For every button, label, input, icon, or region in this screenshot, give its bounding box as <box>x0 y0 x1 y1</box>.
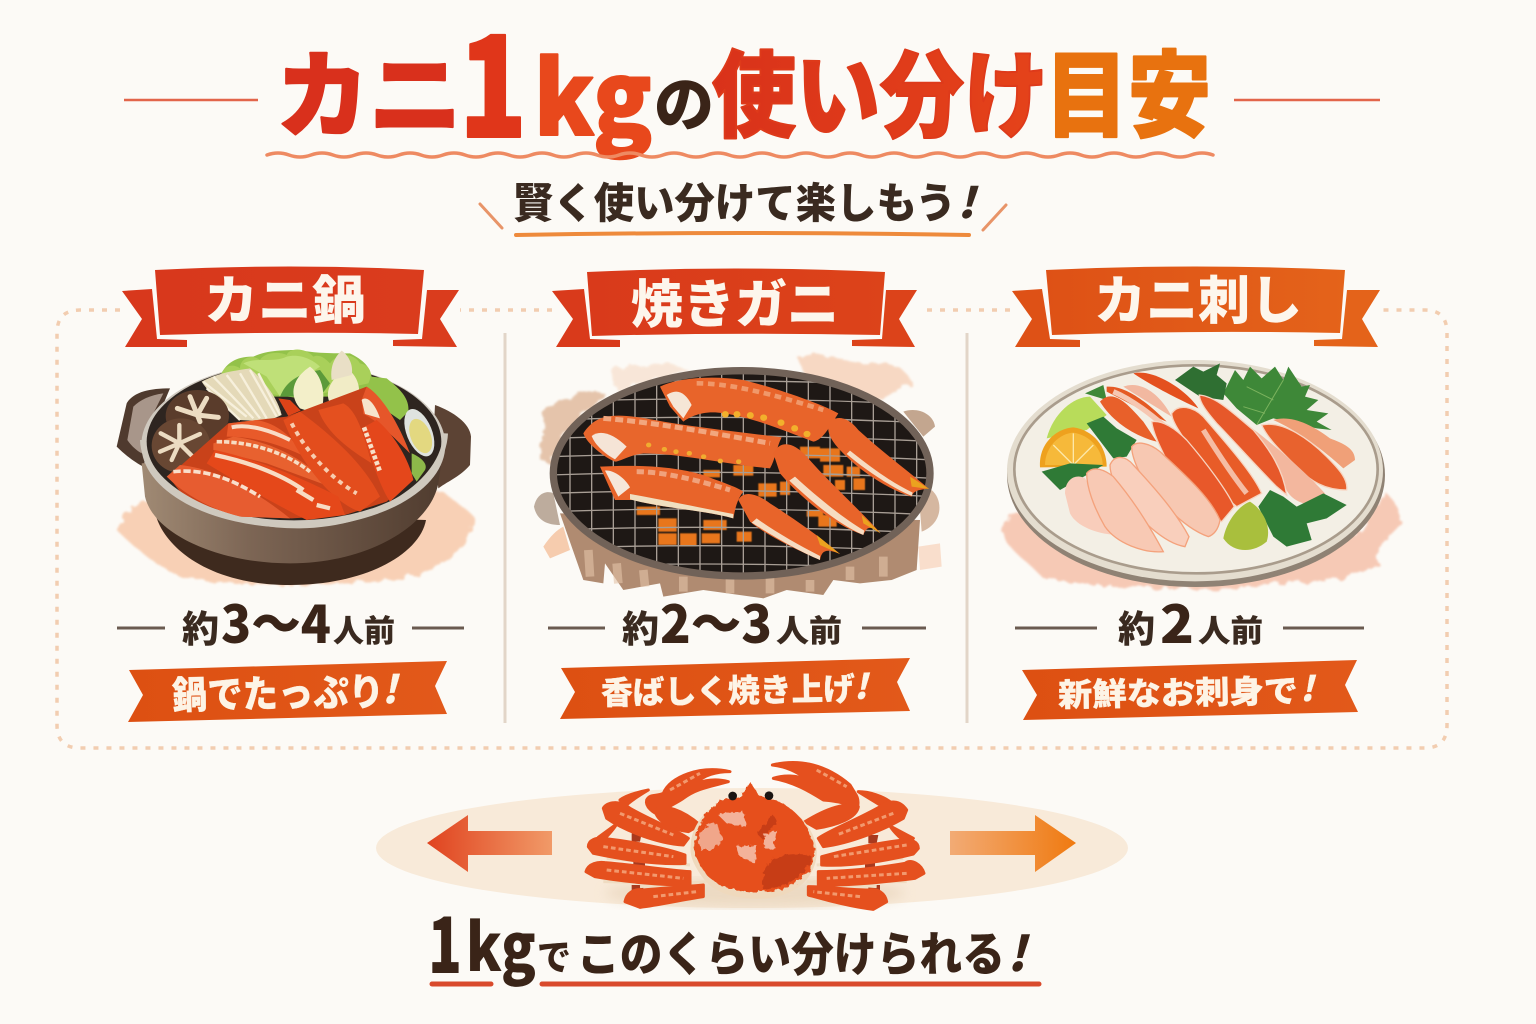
cap <box>166 390 229 442</box>
dots <box>648 445 739 462</box>
ribbon tail left <box>552 289 620 347</box>
shell <box>583 416 782 468</box>
wasabi <box>1223 502 1268 550</box>
grill base <box>553 371 930 576</box>
slice O2 <box>1172 407 1262 507</box>
underside <box>789 477 864 535</box>
embers <box>637 447 865 546</box>
panel: kani sashi <box>1002 259 1400 720</box>
small leaf top <box>1085 385 1107 400</box>
orange slice top a <box>1133 373 1198 408</box>
crab piece: mid <box>213 437 330 487</box>
caption de: で <box>537 929 571 981</box>
pale piece 3 <box>1110 457 1189 547</box>
shell highlight <box>697 383 823 410</box>
title text: meyasu: 目安 <box>1045 21 1211 157</box>
ribbon shape <box>128 661 447 722</box>
leaf under citrus <box>1042 463 1103 490</box>
pot rim front highlight <box>142 433 446 526</box>
pale piece 2 <box>1087 469 1163 552</box>
title text: tsukaiwake: 使い分け <box>712 21 1048 157</box>
ribbon: nabe de tappuri <box>128 659 447 722</box>
title decorative right line <box>1234 99 1380 101</box>
carapace rim <box>690 783 817 899</box>
left handle highlight <box>127 393 163 453</box>
grill grid <box>557 374 926 572</box>
caption 1: 1 <box>428 885 462 995</box>
napa wedge 2 <box>328 368 359 407</box>
segments <box>1053 433 1093 465</box>
underside <box>630 494 733 518</box>
shell <box>398 405 440 461</box>
right claw arm <box>805 805 858 828</box>
back piece highlight <box>232 426 290 440</box>
banner label: カニ刺し <box>1094 259 1302 334</box>
lettuce highlight <box>243 356 320 397</box>
illustration: crab hot pot <box>117 350 475 585</box>
ribbon tail right <box>852 290 917 347</box>
left leg 2 tip <box>598 824 617 840</box>
rule left <box>1015 626 1097 630</box>
shell <box>773 444 881 535</box>
leg lower <box>600 466 743 518</box>
left handle <box>117 388 170 467</box>
left claw <box>646 770 730 815</box>
banner label: 焼きガニ <box>631 263 839 338</box>
left joints <box>632 833 645 897</box>
arrow left <box>427 815 552 872</box>
right leg 1 <box>818 802 907 847</box>
peel <box>1040 427 1107 467</box>
subtitle underline <box>516 233 969 235</box>
illustration: crab sashimi plate <box>1002 360 1400 589</box>
cut flesh <box>592 433 627 459</box>
watercolor splash top left <box>612 364 690 390</box>
crab piece: middle back <box>318 403 372 463</box>
left leg 3 <box>586 862 690 885</box>
servings: 3-4 <box>117 583 464 658</box>
flesh <box>1045 433 1103 465</box>
label ninmae: 人前 <box>333 606 395 651</box>
enoki mushrooms <box>203 370 280 420</box>
label yaku: 約 <box>622 599 659 653</box>
ribbon text: 香ばしく焼き上げ <box>601 664 855 714</box>
ribbon: shinsen <box>1022 660 1358 720</box>
pot rim <box>141 362 445 528</box>
ribbon tail left <box>122 289 187 347</box>
enoki bundle base <box>202 368 282 422</box>
divider left <box>504 333 506 723</box>
slice O5 <box>1273 419 1355 468</box>
rule right <box>862 626 926 630</box>
pale patch center <box>717 812 777 863</box>
ribbon tail left <box>1012 289 1080 347</box>
shiso leaf large <box>1223 367 1332 430</box>
ribbon tail right <box>393 290 459 347</box>
label yaku: 約 <box>182 599 219 653</box>
leg middle <box>583 416 782 468</box>
ribbon text: 新鮮なお刺身で <box>1058 666 1298 716</box>
watercolor splash <box>117 492 475 585</box>
slice O2 highlight <box>1203 430 1247 493</box>
cut flesh <box>667 392 692 418</box>
arrow right <box>950 815 1076 872</box>
shiso veins <box>1243 380 1283 425</box>
crab piece: front long <box>207 450 345 520</box>
dark patch <box>757 815 812 890</box>
ribbon exclaim: ! <box>381 659 401 714</box>
slice O3 pink <box>1250 427 1325 505</box>
left leg 1 tip <box>620 790 648 805</box>
rule right <box>412 626 464 630</box>
orange slice top c <box>1107 387 1167 422</box>
shiso dark <box>1175 363 1227 400</box>
section: whole crab <box>376 762 1128 909</box>
tip <box>910 477 929 489</box>
banner: kani sashi <box>1012 259 1380 347</box>
front left highlight <box>173 471 260 497</box>
rule right <box>1283 626 1364 630</box>
orange slice top d <box>1100 396 1157 442</box>
greens <box>220 350 408 420</box>
ribbon main <box>155 266 424 335</box>
count: 3～4 <box>221 583 331 658</box>
subtitle <box>480 170 1006 235</box>
banner label: カニ鍋 <box>204 259 366 334</box>
shell <box>828 418 928 497</box>
subtitle left accent <box>480 204 502 228</box>
ribbon text: 鍋でたっぷり <box>171 661 384 720</box>
gills <box>160 425 200 460</box>
title text: no: の <box>654 57 714 144</box>
underside <box>752 518 820 560</box>
plate underside <box>1007 363 1385 587</box>
ribbon shape <box>1022 660 1358 720</box>
gills <box>177 397 218 422</box>
watercolor splash <box>1002 493 1400 589</box>
panel: dashed frame <box>57 310 1447 748</box>
crab piece: top right <box>362 387 410 453</box>
watercolor splash top right <box>797 355 912 400</box>
meat <box>405 416 437 456</box>
right leg 4 <box>808 887 887 909</box>
clam <box>398 405 440 461</box>
right leg 3 <box>818 862 924 885</box>
orange slice top b <box>1123 385 1172 417</box>
shadow left <box>534 492 560 525</box>
claw lower <box>738 494 840 560</box>
cut flesh <box>605 471 630 497</box>
caption <box>428 885 1039 995</box>
herb bunch <box>1258 490 1347 547</box>
ribbon main <box>1046 266 1345 335</box>
crab piece: front left <box>167 465 290 518</box>
grill ring <box>553 371 930 576</box>
underside <box>847 451 913 496</box>
mid piece highlight <box>217 442 310 472</box>
watercolor splash left <box>541 392 605 463</box>
lettuce <box>1047 397 1107 438</box>
eye right <box>765 791 773 800</box>
divider right <box>966 333 968 723</box>
citrus slice <box>1040 427 1107 467</box>
right leg 1 tip <box>858 792 890 805</box>
ribbon: koubashiku <box>560 658 910 719</box>
center piece pincer <box>278 398 301 416</box>
servings: 2 <box>1015 583 1364 658</box>
ribbon exclaim: ! <box>1300 662 1317 711</box>
banner: yaki gani <box>552 263 917 347</box>
rule left <box>117 626 165 630</box>
subtitle text: 賢く使い分けて楽しもう <box>513 170 956 231</box>
lettuce shadow <box>280 370 330 397</box>
tip <box>817 535 840 554</box>
shadow far right <box>920 490 939 532</box>
crab base under pieces <box>168 387 412 518</box>
panel: yaki gani <box>534 263 942 719</box>
eye left <box>728 792 737 800</box>
slice O1 <box>1152 421 1234 522</box>
pot body <box>142 433 446 563</box>
leg top <box>660 378 838 442</box>
crab piece: center <box>283 412 380 512</box>
label yaku: 約 <box>1118 599 1155 653</box>
caption main: このくらい分けられる <box>577 916 1005 985</box>
left claw arm <box>655 807 700 832</box>
shadow right <box>903 410 935 437</box>
claw middle <box>773 444 881 535</box>
highlight <box>637 472 730 490</box>
title text: kg: kg <box>534 19 652 165</box>
slice O3 <box>1199 395 1287 495</box>
count: 2 <box>1160 583 1194 658</box>
right claw <box>772 762 858 813</box>
illustration: grilled crab legs <box>534 355 942 598</box>
cream connectors <box>603 858 907 887</box>
front long highlight <box>215 455 330 508</box>
label ninmae: 人前 <box>1198 606 1263 651</box>
label ninmae: 人前 <box>776 606 842 651</box>
ribbon tail right <box>1314 290 1380 347</box>
tip <box>862 515 881 533</box>
ribbon shape <box>560 658 910 719</box>
pot interior <box>147 363 441 520</box>
ribbon exclaim: ! <box>853 660 871 709</box>
crab piece: top right flesh <box>362 399 380 418</box>
illustration: snow crab <box>586 762 924 909</box>
mushroom back <box>166 390 229 442</box>
leg highlights <box>603 770 907 897</box>
pale piece 1 <box>1065 476 1115 535</box>
mushroom front <box>152 418 210 473</box>
left leg 4 <box>625 885 703 907</box>
pale piece 4 <box>1132 443 1220 537</box>
right handle <box>433 405 471 488</box>
title text: kani: カニ <box>276 21 462 157</box>
shell <box>600 466 743 518</box>
left leg 1 <box>603 803 688 845</box>
pale patch left <box>698 823 723 850</box>
title wavy underline <box>267 153 1213 157</box>
lower right greens <box>412 453 426 482</box>
pale edge top <box>1113 392 1163 425</box>
panel: kani nabe <box>117 259 475 722</box>
right leg 2 <box>822 840 918 865</box>
center piece highlight <box>292 423 357 493</box>
shell <box>738 494 840 560</box>
carapace <box>695 782 814 892</box>
napa wedge 1 <box>293 367 323 415</box>
cream ellipse <box>376 788 1128 908</box>
plate top <box>1007 360 1383 581</box>
shell <box>660 378 838 442</box>
shell highlight <box>603 418 770 443</box>
servings: 2-3 <box>548 583 926 658</box>
count: 2～3 <box>660 583 772 658</box>
plate rim line <box>1014 365 1378 573</box>
subtitle right accent <box>983 205 1006 230</box>
ribbon main <box>587 268 885 336</box>
grill under-shadow streaks <box>560 513 920 598</box>
cap <box>152 418 210 473</box>
subtitle exclamation: ! <box>957 170 980 231</box>
left leg 2 <box>588 838 685 864</box>
napa wedge 3 <box>331 351 352 380</box>
crab shadow <box>605 879 905 907</box>
caption underline right <box>542 982 1039 986</box>
streak highlights <box>588 550 883 593</box>
crab piece: right <box>362 420 413 502</box>
lettuce bumps <box>222 350 371 398</box>
right piece edge <box>364 427 380 472</box>
title <box>124 0 1380 177</box>
crab piece: back <box>227 420 302 455</box>
banner: kani nabe <box>122 259 459 347</box>
caption underline left <box>432 982 491 986</box>
title decorative left line <box>124 99 258 101</box>
slice O4 <box>1262 424 1347 490</box>
rule left <box>548 626 605 630</box>
right leg 2 tip <box>890 826 913 843</box>
splash bottom right peach <box>918 543 942 570</box>
claw top <box>828 418 929 497</box>
caption kg: kg <box>466 895 536 991</box>
pot stand <box>155 512 426 585</box>
yellow dots <box>725 414 807 434</box>
right joints <box>865 835 880 897</box>
caption exclaim: ! <box>1007 915 1031 985</box>
splash bottom left peach <box>543 527 570 558</box>
fern leaf <box>1087 417 1137 458</box>
